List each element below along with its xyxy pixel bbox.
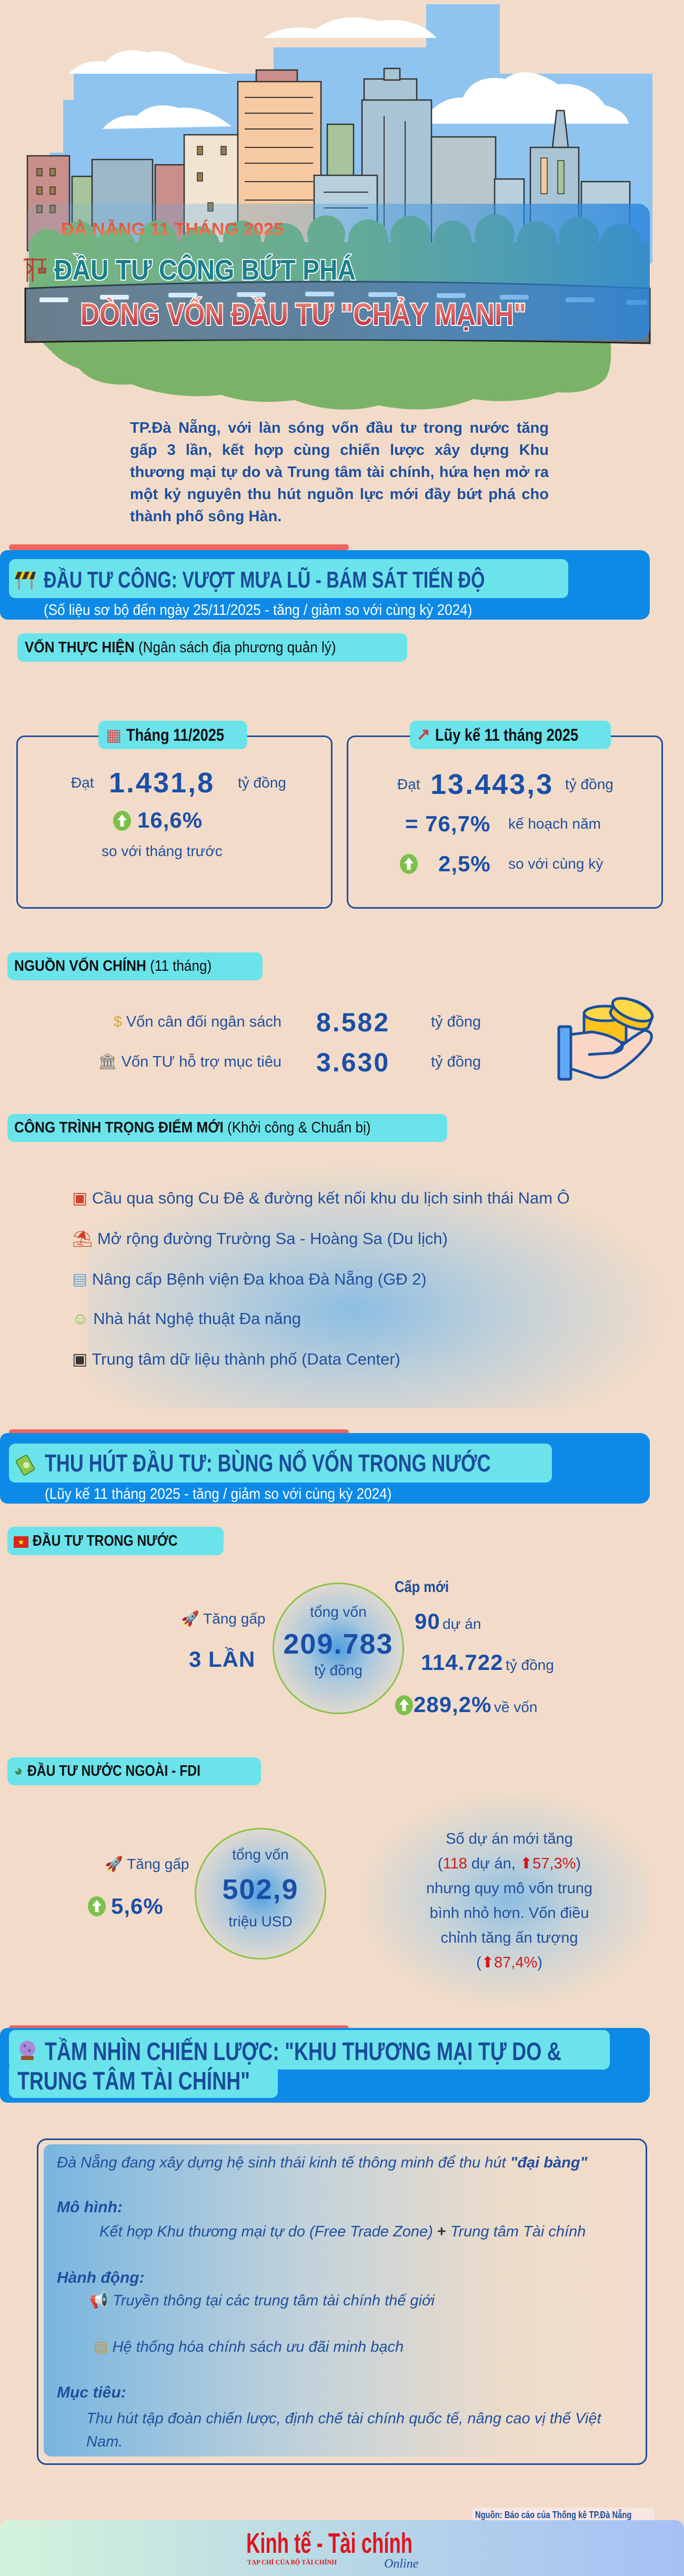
section 2 header: THU HÚT ĐẦU TƯ: BÙNG NỔ VỐN TRONG NƯỚC xyxy=(45,1449,491,1477)
pill: dau tu trong nuoc xyxy=(7,1527,224,1555)
funding rows: 3.630 xyxy=(316,1048,390,1077)
panel: luy ke 11 thang: Đạt xyxy=(397,776,420,792)
icon: crane xyxy=(24,258,46,282)
panel: vision: Hành động: xyxy=(57,2269,145,2286)
section 1 header xyxy=(0,544,650,620)
funding rows xyxy=(98,1008,481,1077)
label pill xyxy=(98,721,247,749)
circle: total capital xyxy=(273,1583,404,1714)
domestic investment block: Cấp mới xyxy=(395,1578,449,1596)
pill: cong trinh trong diem: CÔNG TRÌNH TRỌNG ĐIỂM MỚI (Khởi công & Chuẩn bị) xyxy=(14,1119,371,1136)
section title: ĐẦU TƯ CÔNG: VƯỢT MƯA LŨ - BÁM SÁT TIẾN ĐỘ xyxy=(44,567,485,593)
footer with logo: Kinh tế - Tài chính xyxy=(246,2528,413,2559)
label pill: Tháng 11/2025 xyxy=(126,725,224,744)
subtitle: (Số liệu sơ bộ đến ngày 25/11/2025 - tăng / giảm so với cùng kỳ 2024) xyxy=(44,602,472,619)
panel: luy ke 11 thang: 2,5% xyxy=(438,851,491,876)
circle: FDI total: triệu USD xyxy=(228,1913,293,1929)
footer with logo xyxy=(0,2520,684,2576)
source note xyxy=(472,2508,655,2522)
panel: vision: Mô hình: xyxy=(57,2199,123,2216)
panel: key projects list: ▣ Cầu qua sông Cu Đê & đường kết nối khu du lịch sinh thái Nam Ô xyxy=(72,1189,570,1207)
circle: FDI total xyxy=(195,1828,326,1960)
FDI note panel xyxy=(345,1790,650,2010)
circle: total capital: tổng vốn xyxy=(310,1604,367,1620)
panel: thang 11/2025: so với tháng trước xyxy=(102,843,223,859)
panel: thang 11/2025: tỷ đồng xyxy=(238,774,286,791)
circle: FDI total: 502,9 xyxy=(222,1874,299,1905)
funding rows: 8.582 xyxy=(316,1008,390,1037)
road xyxy=(25,282,650,343)
icon: money xyxy=(16,1455,35,1476)
panel: luy ke 11 thang: Lũy kế 11 tháng 2025 xyxy=(435,725,578,744)
FDI note panel: (⬆87,4%) xyxy=(476,1954,542,1971)
panel: luy ke 11 thang: kế hoạch năm xyxy=(508,815,601,832)
panel: key projects list: ⛱ Mở rộng đường Trường Sa - Hoàng Sa (Du lịch) xyxy=(72,1229,448,1248)
panel: vision: Thu hút tập đoàn chiến lược, định chế tài chính quốc tế, nâng cao vị thế Việt Nam. xyxy=(86,2410,601,2450)
green ground xyxy=(37,337,611,410)
header illustration xyxy=(24,4,652,410)
section 3 header: TẦM NHÌN CHIẾN LƯỢC: "KHU THƯƠNG MẠI TỰ DO & xyxy=(45,2038,561,2066)
pill: von thuc hien xyxy=(17,633,407,662)
panel: thang 11/2025: Đạt xyxy=(71,774,94,791)
blue overlay band xyxy=(26,204,650,340)
section 3 header: TRUNG TÂM TÀI CHÍNH" xyxy=(17,2067,250,2095)
domestic investment block: 90 dự án xyxy=(415,1609,481,1634)
title kicker: ĐÀ NẴNG 11 THÁNG 2025 xyxy=(61,220,284,238)
panel: luy ke 11 thang: ↗ xyxy=(416,725,430,744)
funding rows: $ Vốn cân đối ngân sách xyxy=(114,1013,281,1030)
panel: luy ke 11 thang xyxy=(347,721,663,909)
panel: vision: Đà Nẵng đang xây dựng hệ sinh thái kinh tế thông minh để thu hút "đại bàng" xyxy=(57,2154,587,2171)
circle: total capital: 209.783 xyxy=(283,1628,394,1660)
section 2 header xyxy=(0,1429,650,1504)
panel: vision: Kết hợp Khu thương mại tự do (Free Trade Zone) + Trung tâm Tài chính xyxy=(99,2223,586,2240)
panel: luy ke 11 thang: 13.443,3 xyxy=(430,769,554,800)
panel: luy ke 11 thang: so với cùng kỳ xyxy=(508,856,603,872)
panel: key projects list: ☺ Nhà hát Nghệ thuật Đa năng xyxy=(72,1309,301,1328)
pill: FDI: ◕ xyxy=(14,1763,23,1779)
title line 1: ĐẦU TƯ CÔNG BỨT PHÁ xyxy=(54,254,356,286)
pill: nguon von chinh: NGUỒN VỐN CHÍNH (11 tháng) xyxy=(14,958,212,974)
footer with logo: Online xyxy=(384,2557,419,2571)
domestic investment block xyxy=(181,1578,554,1717)
circle: FDI total: tổng vốn xyxy=(232,1846,289,1863)
panel: thang 11/2025: 16,6% xyxy=(137,808,203,832)
footer with logo: TẠP CHÍ CỦA BỘ TÀI CHÍNH xyxy=(247,2558,337,2566)
panel: luy ke 11 thang: = 76,7% xyxy=(405,811,490,836)
pill: FDI xyxy=(7,1757,261,1785)
label pill: ▦ xyxy=(106,725,122,744)
domestic investment block: 114.722 tỷ đồng xyxy=(421,1650,554,1675)
funding rows: 🏛 Vốn TƯ hỗ trợ mục tiêu xyxy=(98,1053,281,1070)
intro paragraph: TP.Đà Nẵng, với làn sóng vốn đầu tư trong nước tăng gấp 3 lần, kết hợp cùng chiến lược xây dựng Khu thương mại tự do và Trung tâm tài chính, hứa hẹn mở ra một kỷ nguyên thu hút nguồn lực mới đầy bứt phá cho thành phố sông Hàn. xyxy=(130,420,549,525)
FDI block xyxy=(88,1828,326,1960)
pill: dau tu trong nuoc: ĐẦU TƯ TRONG NƯỚC xyxy=(33,1533,178,1549)
panel: thang 11/2025: 1.431,8 xyxy=(109,767,215,799)
FDI note panel: Số dự án mới tăng xyxy=(446,1831,573,1847)
bushes xyxy=(29,214,650,295)
panel: key projects list: ▤ Nâng cấp Bệnh viện Đa khoa Đà Nẵng (GĐ 2) xyxy=(72,1270,427,1288)
domestic investment block: 🚀 Tăng gấp xyxy=(181,1610,265,1627)
pill: von thuc hien: VỐN THỰC HIỆN (Ngân sách địa phương quản lý) xyxy=(25,639,336,656)
pill: nguon von chinh xyxy=(7,952,263,980)
FDI note panel: bình nhỏ hơn. Vốn điều xyxy=(430,1905,589,1922)
domestic investment block: 3 LẦN xyxy=(189,1647,255,1672)
panel: vision: ▤ Hệ thống hóa chính sách ưu đãi minh bạch xyxy=(94,2339,404,2355)
icon: crystal ball xyxy=(19,2041,35,2060)
FDI note panel: chỉnh tăng ấn tượng xyxy=(441,1929,578,1946)
circle: total capital: tỷ đồng xyxy=(314,1662,363,1678)
icon: hand with coins xyxy=(558,997,653,1080)
title line 2: DÒNG VỐN ĐẦU TƯ "CHẢY MẠNH" xyxy=(81,297,526,332)
section 3 header xyxy=(0,2025,650,2103)
source note: Nguồn: Báo cáo của Thống kê TP.Đà Nẵng xyxy=(475,2510,631,2520)
panel: key projects list xyxy=(87,1163,668,1408)
FDI block: 🚀 Tăng gấp xyxy=(105,1856,189,1872)
pill: cong trinh trong diem xyxy=(7,1114,447,1142)
panel: key projects list: ▣ Trung tâm dữ liệu thành phố (Data Center) xyxy=(72,1350,400,1368)
FDI note panel: nhưng quy mô vốn trung xyxy=(426,1880,592,1897)
FDI block: 5,6% xyxy=(111,1894,164,1918)
text: tỷ đồng xyxy=(431,1013,481,1030)
panel: thang 11/2025 xyxy=(16,721,333,909)
panel: vision: Mục tiêu: xyxy=(57,2384,126,2401)
panel: vision xyxy=(37,2139,647,2465)
domestic investment block: 289,2% về vốn xyxy=(414,1692,537,1717)
FDI note panel: (118 dự án, ⬆57,3%) xyxy=(438,1855,581,1872)
icon: up arrow xyxy=(113,811,131,831)
pill: dau tu trong nuoc: ★ xyxy=(18,1538,24,1546)
pill: FDI: ĐẦU TƯ NƯỚC NGOÀI - FDI xyxy=(27,1763,200,1779)
icon: barrier xyxy=(15,572,36,590)
section 2 header: (Lũy kế 11 tháng 2025 - tăng / giảm so với cùng kỳ 2024) xyxy=(45,1486,391,1503)
text: tỷ đồng xyxy=(431,1053,481,1070)
panel: vision: 📢 Truyền thông tại các trung tâm tài chính thế giới xyxy=(89,2292,435,2309)
panel: luy ke 11 thang: tỷ đồng xyxy=(565,776,613,792)
